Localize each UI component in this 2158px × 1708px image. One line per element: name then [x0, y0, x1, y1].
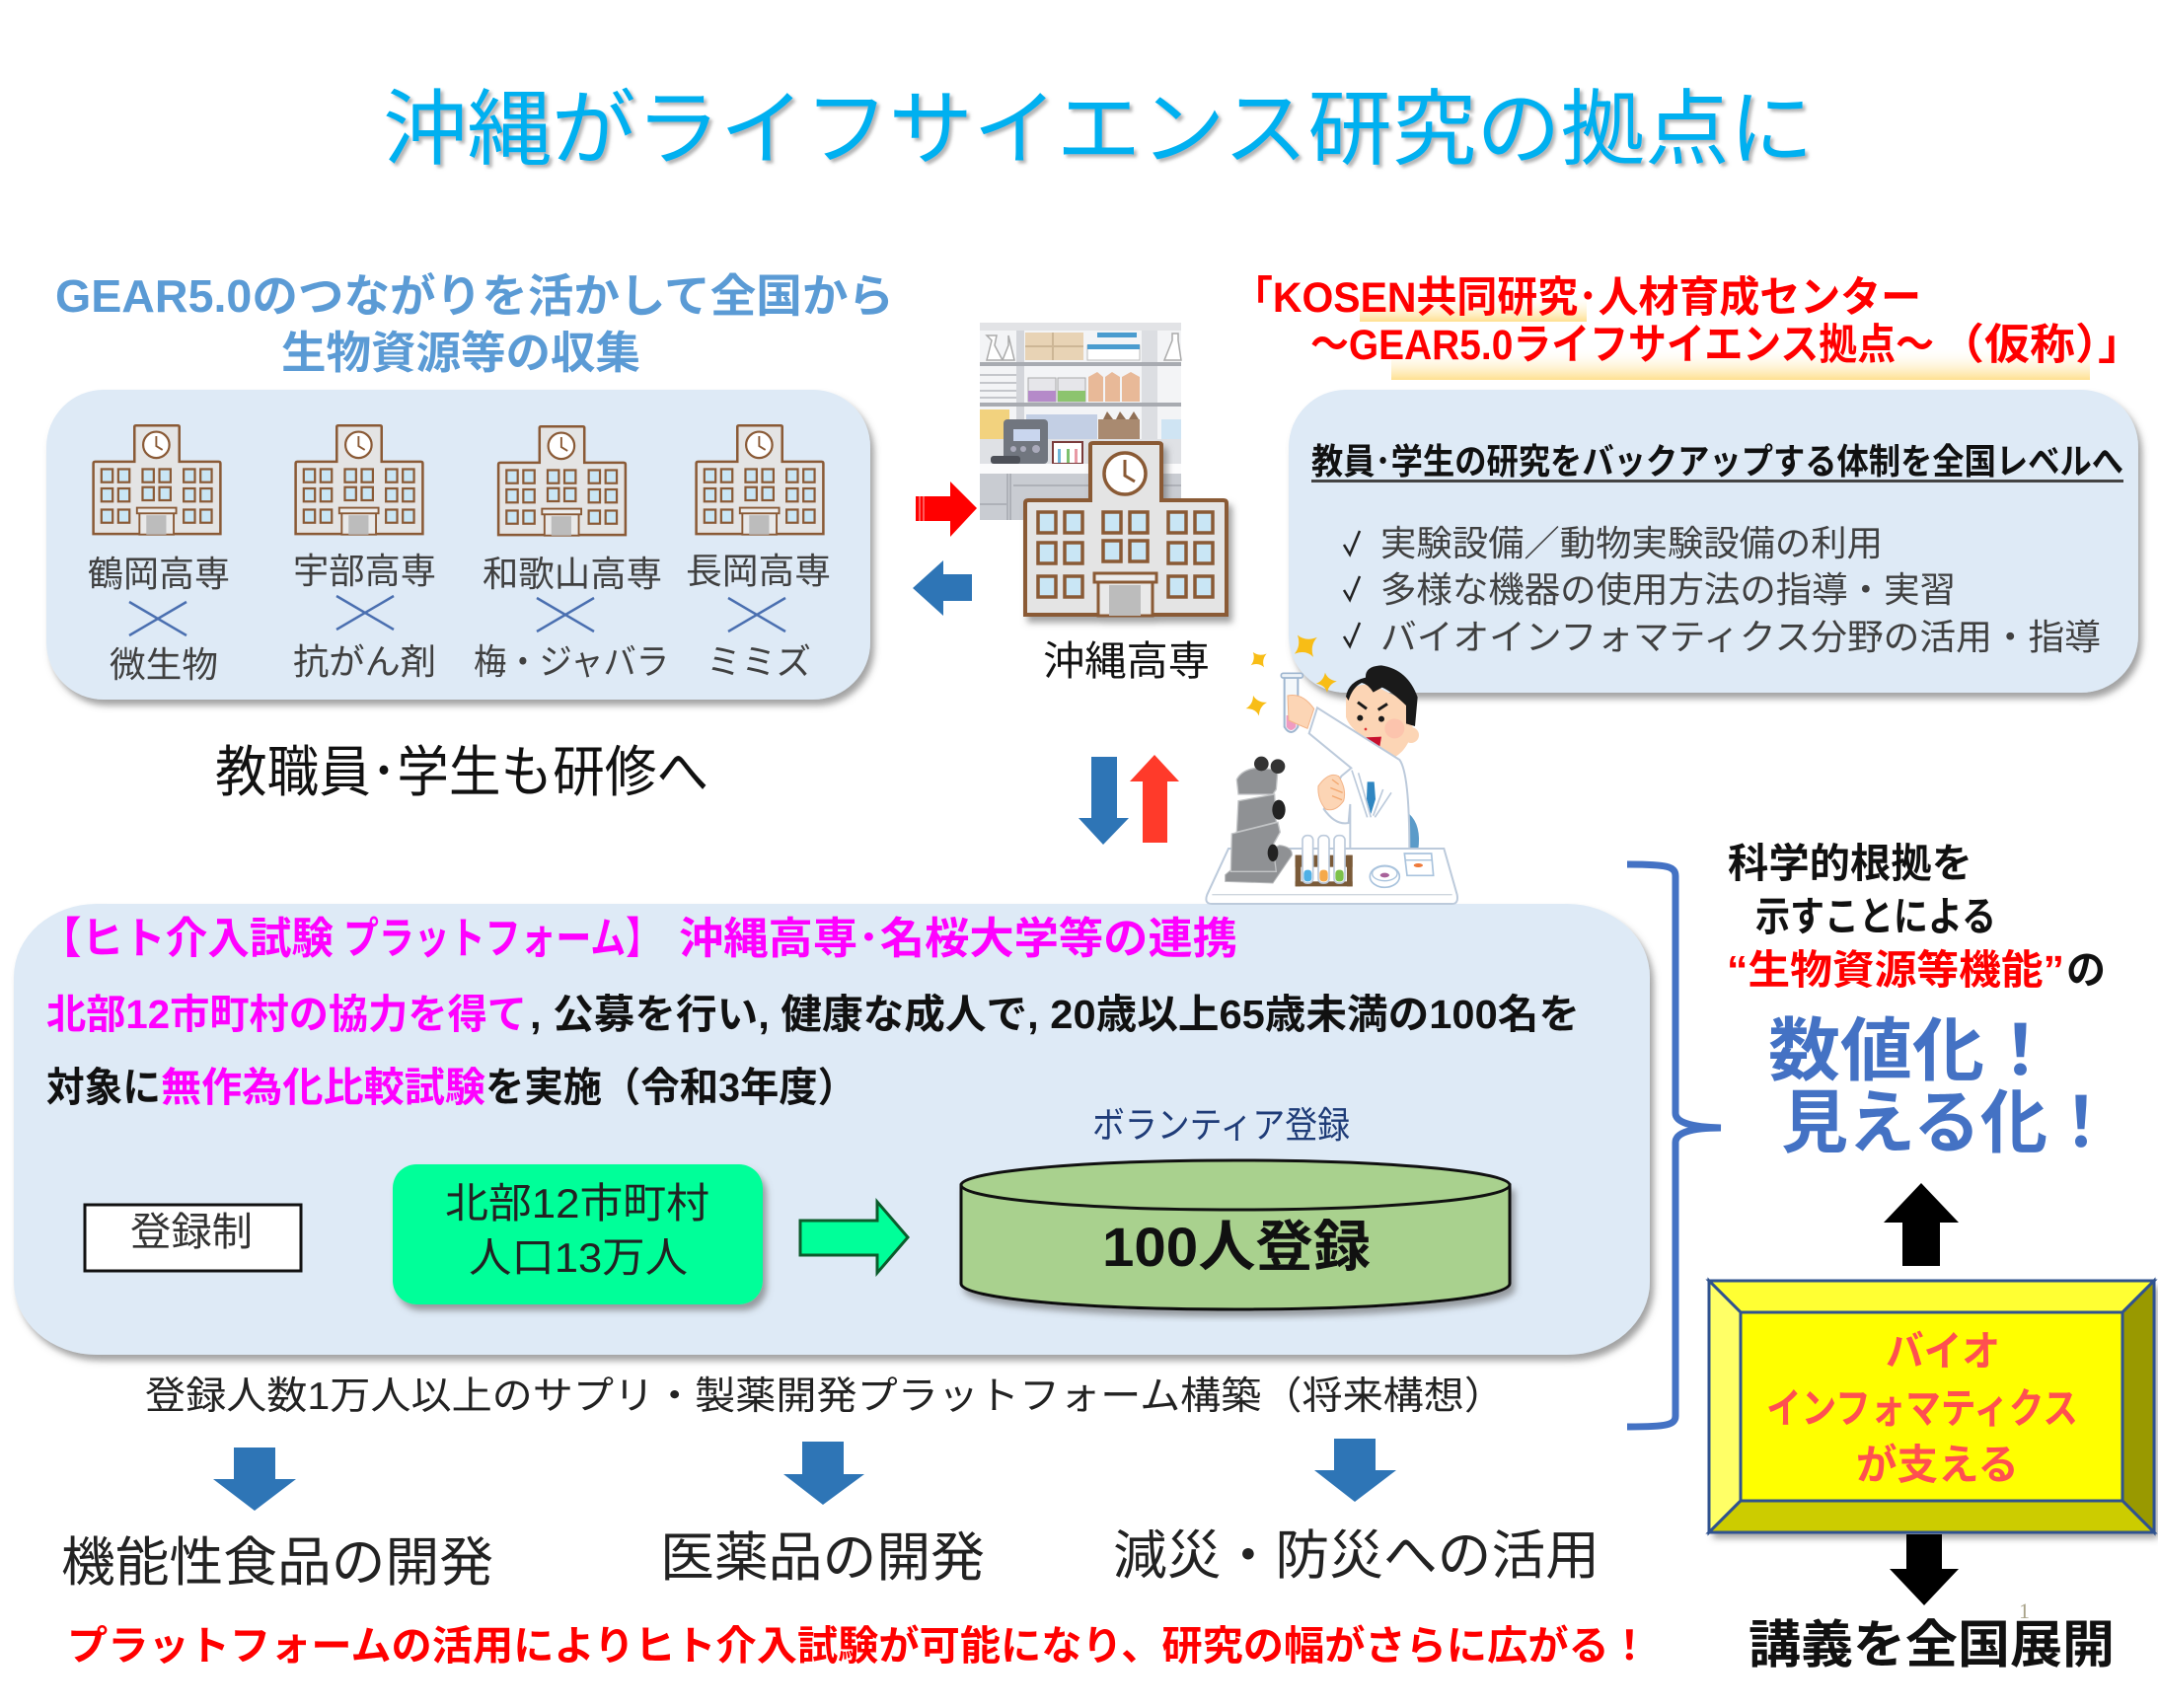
text: staff and student training: 教職員･学生も研修へ	[215, 741, 708, 803]
box: registration system: 登録制	[130, 1211, 253, 1254]
college column: Nagaoka	[686, 425, 831, 682]
college column: Nagaoka: 長岡高専	[686, 551, 831, 591]
brace	[1627, 864, 1721, 1427]
text: scientific evidence	[1727, 841, 2106, 993]
text: scientific evidence: の	[2066, 947, 2106, 993]
arrow: to pharmaceuticals	[783, 1442, 864, 1505]
college column: Tsuruoka: 鶴岡高専	[88, 554, 230, 594]
panel: human intervention trial platform	[14, 904, 1650, 1355]
title: 沖縄がライフサイエンス研究の拠点に	[383, 83, 1814, 176]
platform description: 北部12市町村の協力を得て	[46, 992, 527, 1037]
label: Okinawa college: 沖縄高専	[1043, 638, 1210, 684]
arrow: to functional foods	[213, 1448, 296, 1511]
box: northern municipalities: 北部12市町村	[445, 1180, 709, 1226]
text: scientific evidence: “生物資源等機能”	[1727, 947, 2064, 993]
check list: 実験設備／動物実験設備の利用	[1380, 523, 1883, 563]
cylinder: 100 registrants: 100人登録	[1102, 1216, 1371, 1278]
arrow: black up	[1884, 1183, 1959, 1266]
heading: KOSEN research center	[1232, 274, 2143, 369]
person	[1288, 665, 1419, 850]
college column: Nagaoka: ミミズ	[707, 641, 811, 682]
panel: national research backup	[1289, 390, 2138, 693]
text: quantify and visualize: 数値化！	[1768, 1012, 2056, 1089]
panel: partner colleges	[46, 390, 870, 700]
college column: Ube: 抗がん剤	[293, 641, 436, 682]
test tube	[1281, 673, 1302, 732]
college column: Wakayama: 梅・ジャバラ	[474, 641, 669, 682]
college column: Ube	[293, 425, 436, 682]
icon: Okinawa college building	[1025, 443, 1227, 616]
callout: research expansion: プラットフォームの活用によりヒト介入試験が可能になり、研究の幅がさらに広がる！	[67, 1623, 1650, 1669]
text: scientific evidence: 科学的根拠を	[1728, 841, 1972, 886]
platform description: , 公募を行い, 健康な成人で, 20歳以上65歳未満の100名を	[530, 992, 1580, 1037]
table	[1206, 849, 1457, 904]
college column: Tsuruoka: 微生物	[110, 644, 218, 685]
arrow: black down	[1890, 1534, 1959, 1605]
arrow: green right	[800, 1202, 908, 1273]
arrow: red up	[1130, 755, 1179, 843]
college column: Tsuruoka	[88, 425, 230, 685]
check list: 多様な機器の使用方法の指導・実習	[1380, 569, 1956, 610]
illustration: scientist with microscope	[1206, 635, 1457, 904]
box: registration system	[85, 1205, 301, 1271]
red heading highlight band	[1360, 294, 2090, 380]
arrow: to disaster prevention	[1314, 1439, 1396, 1502]
arrow: blue down	[1079, 757, 1129, 845]
box: bioinformatics bevel: バイオ	[1886, 1328, 2000, 1374]
text: nationwide lectures: 講義を全国展開	[1749, 1617, 2115, 1674]
platform heading: プラットフォーム】	[343, 915, 661, 963]
check list: バイオインフォマティクス分野の活用・指導	[1380, 617, 2101, 657]
college column: Wakayama: 和歌山高専	[483, 554, 662, 594]
text: scientific evidence: 示すことによる	[1755, 894, 1996, 939]
check list	[1344, 523, 2101, 657]
college column: Ube: 宇部高専	[293, 551, 436, 591]
heading: KOSEN research center: 「KOSEN共同研究･人材育成センター	[1232, 274, 1921, 322]
platform heading	[39, 915, 1237, 963]
box: northern municipalities: 人口13万人	[469, 1234, 688, 1281]
text: functional foods: 機能性食品の開発	[61, 1533, 493, 1593]
text: quantify and visualize: 見える化！	[1781, 1084, 2115, 1161]
platform description: 無作為化比較試験	[161, 1065, 485, 1110]
text: future platform concept: 登録人数1万人以上のサプリ・製薬開発プラットフォーム構築（将来構想）	[145, 1375, 1505, 1418]
page number: 1	[2019, 1598, 2030, 1623]
heading: nationwide collection: GEAR5.0のつながりを活かして全国から	[55, 270, 894, 322]
heading: nationwide collection	[55, 270, 894, 378]
platform description: を実施（令和3年度）	[485, 1065, 856, 1110]
test tube rack	[1296, 836, 1353, 886]
text: pharmaceuticals: 医薬品の開発	[660, 1528, 985, 1588]
platform description: 対象に	[46, 1065, 161, 1110]
arrow: red right	[916, 482, 977, 537]
microscope	[1226, 757, 1292, 883]
cylinder: 100 registrants	[961, 1160, 1510, 1309]
arrow: blue left	[913, 560, 972, 616]
heading: KOSEN research center: （仮称）」	[1939, 322, 2143, 369]
platform heading: 【ヒト介入試験	[39, 915, 334, 963]
label: volunteer registration: ボランティア登録	[1092, 1105, 1350, 1146]
text: quantify and visualize	[1768, 1012, 2115, 1161]
box: bioinformatics bevel: が支える	[1856, 1442, 2019, 1488]
box: bioinformatics bevel: インフォマティクス	[1766, 1385, 2078, 1432]
box: bioinformatics bevel	[1709, 1281, 2154, 1532]
heading: KOSEN research center: ～GEAR5.0ライフサイエンス拠点～	[1310, 322, 1934, 369]
platform heading: 沖縄高専･名桜大学等の連携	[679, 915, 1237, 963]
stars	[1245, 635, 1338, 717]
college column: Wakayama	[474, 426, 669, 682]
petri dish	[1370, 865, 1399, 887]
platform description	[46, 992, 1580, 1110]
heading: nationwide collection: 生物資源等の収集	[281, 328, 640, 378]
text: disaster prevention: 減災・防災への活用	[1113, 1526, 1600, 1586]
sample card	[1404, 854, 1434, 875]
illustration: lab shelves	[980, 323, 1181, 520]
box: northern municipalities	[393, 1164, 763, 1304]
